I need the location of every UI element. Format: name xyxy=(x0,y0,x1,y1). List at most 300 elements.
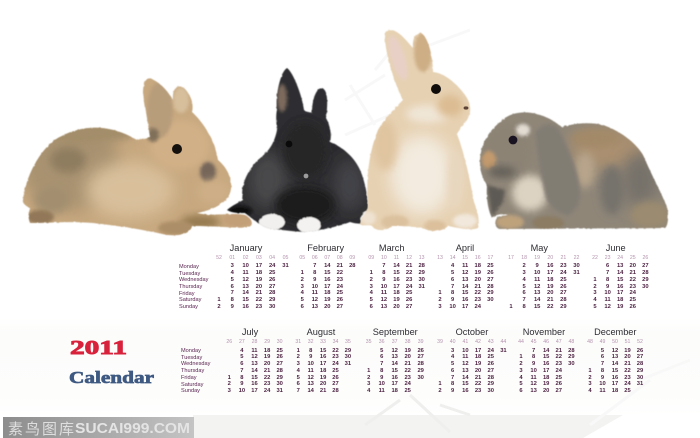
month: October: 18 xyxy=(475,354,481,360)
month: October: 8 xyxy=(451,381,454,387)
month: August: 24 xyxy=(332,361,339,367)
month: August: 30 xyxy=(345,354,351,360)
month: September: 1 xyxy=(367,368,370,374)
month: April: 14 xyxy=(450,255,455,261)
month: December: 22 xyxy=(624,368,631,374)
month: March: 10 xyxy=(381,284,387,290)
month: August: 32 xyxy=(308,339,314,345)
month: January: 01 xyxy=(229,255,235,261)
month: October: 41 xyxy=(462,339,468,345)
month: December: 2 xyxy=(588,375,592,381)
month: July: 10 xyxy=(239,388,245,394)
month: February: 2 xyxy=(301,277,304,283)
month: July: 26 xyxy=(276,354,283,360)
month: March: 22 xyxy=(406,270,412,276)
month: December: 23 xyxy=(624,375,631,381)
month: October: 15 xyxy=(462,381,469,387)
month: March: 12 xyxy=(381,297,387,303)
month: February: 9 xyxy=(313,277,316,283)
month: November: 21 xyxy=(556,348,562,354)
month: December: 5 xyxy=(601,348,604,354)
month: July: 20 xyxy=(264,361,270,367)
month: September xyxy=(366,327,424,394)
month: May: 14 xyxy=(534,297,540,303)
light calendar band xyxy=(0,318,700,416)
month: April: 6 xyxy=(451,277,454,283)
month: January: 10 xyxy=(242,263,249,269)
month: July: 27 xyxy=(276,361,283,367)
month: February: 15 xyxy=(324,270,331,276)
month: June: 15 xyxy=(617,277,623,283)
month: May: May xyxy=(531,243,548,253)
month: January: 22 xyxy=(256,297,262,303)
month: July xyxy=(226,327,283,394)
weekday labels: first half: Monday xyxy=(179,264,199,270)
month: July: 16 xyxy=(251,381,258,387)
month: July: 30 xyxy=(277,339,283,345)
month: October: 10 xyxy=(462,348,469,354)
month: March: 17 xyxy=(393,284,400,290)
month: August: 19 xyxy=(320,375,326,381)
month: August: 31 xyxy=(295,339,301,345)
month: November: November xyxy=(523,327,565,337)
month: September: 5 xyxy=(380,348,383,354)
watermark bar: SUCAI999.COM xyxy=(75,421,190,437)
month: December: 11 xyxy=(599,388,606,394)
month: August: 12 xyxy=(307,375,314,381)
rabbit 4: grey lop rabbit xyxy=(478,111,669,230)
month: February: 08 xyxy=(337,255,343,261)
month: November: 44 xyxy=(518,339,524,345)
month: July: 28 xyxy=(252,339,257,345)
weekday labels: second half: Sunday xyxy=(181,388,200,394)
rabbit 3: cream rabbit xyxy=(360,29,480,232)
month: September: 11 xyxy=(379,388,385,394)
month: November: 7 xyxy=(532,348,535,354)
weekday labels: first half: Sunday xyxy=(179,304,198,310)
month: April: 9 xyxy=(451,297,454,303)
month: October: 40 xyxy=(450,339,456,345)
month: June: 19 xyxy=(617,304,623,310)
month: December: 50 xyxy=(612,339,618,345)
month: December: 51 xyxy=(625,339,630,345)
month: March: 8 xyxy=(382,270,386,276)
month: March: 1 xyxy=(370,270,373,276)
weekday labels: second half: Friday xyxy=(181,375,197,381)
month: November: 30 xyxy=(568,361,575,367)
month: December: 13 xyxy=(612,354,618,360)
month: September: 10 xyxy=(378,381,385,387)
month: September: 4 xyxy=(367,388,370,394)
month: November: 46 xyxy=(543,339,549,345)
month: January: 15 xyxy=(242,297,249,303)
month: December: 16 xyxy=(612,375,618,381)
month: September: 3 xyxy=(367,381,370,387)
month: February: 05 xyxy=(299,255,305,261)
month: November: 18 xyxy=(543,375,549,381)
weekday labels: second half xyxy=(181,348,210,394)
month: June: 3 xyxy=(593,290,597,296)
month: January: 19 xyxy=(256,277,262,283)
month: March: 4 xyxy=(370,290,373,296)
month: April: 18 xyxy=(475,263,481,269)
month: April: 26 xyxy=(487,270,494,276)
weekday labels: first half: Wednesday xyxy=(179,277,208,283)
month: March: 3 xyxy=(370,284,373,290)
month: December: 20 xyxy=(624,354,631,360)
month: December: 31 xyxy=(637,381,643,387)
month: August: 27 xyxy=(332,381,339,387)
month: November: 27 xyxy=(556,388,562,394)
month: January: 03 xyxy=(256,255,262,261)
month: July: 28 xyxy=(276,368,283,374)
month: February: 20 xyxy=(324,304,331,310)
month: May: 23 xyxy=(560,263,567,269)
month: June: 23 xyxy=(605,255,610,261)
month: July: 6 xyxy=(240,361,244,367)
month: December: 7 xyxy=(601,361,604,367)
month: June: 27 xyxy=(642,263,649,269)
month: February: 24 xyxy=(337,284,343,290)
month: January: 24 xyxy=(269,263,275,269)
month: December: 3 xyxy=(588,381,592,387)
month: July: July xyxy=(242,327,258,337)
month: August: 29 xyxy=(345,348,351,354)
month: April: 23 xyxy=(475,297,481,303)
month: August: 20 xyxy=(320,381,326,387)
month: December: 9 xyxy=(601,375,604,381)
month: January: 8 xyxy=(231,297,234,303)
month: March: 20 xyxy=(393,304,400,310)
month: September: 35 xyxy=(366,339,372,345)
month: December: 12 xyxy=(612,348,618,354)
month: October: 28 xyxy=(488,375,494,381)
month: September: 17 xyxy=(391,381,398,387)
month: May: 19 xyxy=(534,255,540,261)
month: March: 2 xyxy=(370,277,373,283)
month: June: 17 xyxy=(617,290,623,296)
month: March: 09 xyxy=(368,255,374,261)
month: December: 17 xyxy=(612,381,618,387)
month: October: 3 xyxy=(451,348,454,354)
month: March: 7 xyxy=(382,263,386,269)
month: January: 9 xyxy=(231,304,234,310)
month: April: 10 xyxy=(449,304,456,310)
month: January: 05 xyxy=(283,255,288,261)
month: March: 15 xyxy=(393,270,400,276)
month: November: 47 xyxy=(556,339,562,345)
month: May: 13 xyxy=(534,290,540,296)
month: September: 37 xyxy=(392,339,398,345)
month: January: 1 xyxy=(217,297,221,303)
month: December: 24 xyxy=(624,381,631,387)
month: March: 28 xyxy=(418,263,425,269)
month: October: 23 xyxy=(475,388,481,394)
month: August: 9 xyxy=(309,354,312,360)
month: September: 13 xyxy=(391,354,398,360)
month: November: 10 xyxy=(530,368,537,374)
month: October: 4 xyxy=(451,354,454,360)
month: August: 3 xyxy=(297,361,300,367)
rabbit 1: tan rabbit xyxy=(22,78,252,236)
month: December: 8 xyxy=(601,368,604,374)
month: September: 22 xyxy=(404,368,411,374)
month: October: 2 xyxy=(438,388,442,394)
month: January: 31 xyxy=(282,263,289,269)
month: June: 13 xyxy=(617,263,623,269)
month: March: 18 xyxy=(393,290,400,296)
month: November: 6 xyxy=(519,388,523,394)
month: August: 26 xyxy=(332,375,339,381)
weekday labels: second half: Tuesday xyxy=(181,355,202,361)
weekday labels: first half: Tuesday xyxy=(179,271,200,277)
month: October: 7 xyxy=(451,375,454,381)
month: June: 4 xyxy=(593,297,597,303)
month: February: 4 xyxy=(301,290,304,296)
month: May: 27 xyxy=(560,290,567,296)
month: January: 17 xyxy=(256,263,262,269)
month: March: 6 xyxy=(370,304,373,310)
month: August: 15 xyxy=(320,348,326,354)
month: January: 14 xyxy=(242,290,249,296)
month: November: 5 xyxy=(519,381,523,387)
month: July: 14 xyxy=(251,368,258,374)
month: August: 5 xyxy=(297,375,300,381)
month: January: 5 xyxy=(231,277,234,283)
month: February: 28 xyxy=(349,263,356,269)
watermark bar xyxy=(3,417,194,438)
month: May: 19 xyxy=(547,284,553,290)
month: July: 22 xyxy=(264,375,270,381)
month: June: 16 xyxy=(617,284,623,290)
month: August: 4 xyxy=(297,368,300,374)
month: February: 09 xyxy=(349,255,355,261)
month: December: 26 xyxy=(637,348,643,354)
month: September: 8 xyxy=(380,368,383,374)
month: December: 21 xyxy=(624,361,631,367)
month: February: 26 xyxy=(337,297,343,303)
month: August: 22 xyxy=(332,348,339,354)
month: January: 11 xyxy=(243,270,249,276)
month: August: 2 xyxy=(297,354,300,360)
month: October: 1 xyxy=(438,381,442,387)
month: April: 15 xyxy=(462,255,468,261)
month: May: 5 xyxy=(522,284,526,290)
month: June: 6 xyxy=(606,263,609,269)
month: August: 33 xyxy=(320,339,326,345)
month: April: 16 xyxy=(475,255,481,261)
month: February: 06 xyxy=(312,255,318,261)
month: March: 24 xyxy=(406,284,412,290)
month: February: 22 xyxy=(337,270,343,276)
month: June: 22 xyxy=(630,277,636,283)
month: October: 30 xyxy=(488,388,494,394)
month: August: 18 xyxy=(320,368,326,374)
month: January: 2 xyxy=(217,304,221,310)
month: May: 3 xyxy=(522,270,526,276)
month: December xyxy=(587,327,644,394)
month: November: 1 xyxy=(519,354,523,360)
month: May: 25 xyxy=(560,277,567,283)
month: July: 15 xyxy=(251,375,258,381)
month: February: 3 xyxy=(301,284,304,290)
month: January xyxy=(216,243,289,310)
month: April: 5 xyxy=(451,270,454,276)
month: October: 11 xyxy=(462,354,468,360)
month: June: June xyxy=(606,243,626,253)
month: September: 27 xyxy=(417,354,424,360)
month: July: 23 xyxy=(264,381,270,387)
month: November: 15 xyxy=(543,354,549,360)
month: September: 6 xyxy=(380,354,383,360)
month: June: 5 xyxy=(593,304,597,310)
month: February: February xyxy=(307,243,344,253)
month: December: 28 xyxy=(637,361,643,367)
month: August xyxy=(295,327,351,394)
month: February: 12 xyxy=(312,297,318,303)
month: July: 29 xyxy=(264,339,270,345)
month: October: 27 xyxy=(488,368,494,374)
month: March: 31 xyxy=(418,284,425,290)
month: August: 8 xyxy=(309,348,312,354)
month: March: 9 xyxy=(382,277,386,283)
month: June: 9 xyxy=(606,284,609,290)
month: October: 6 xyxy=(451,368,454,374)
month: November: 13 xyxy=(530,388,537,394)
month: February: 8 xyxy=(313,270,316,276)
month: April: 13 xyxy=(437,255,443,261)
month: February: 23 xyxy=(337,277,343,283)
month: July: 8 xyxy=(240,375,244,381)
month: January: 18 xyxy=(256,270,262,276)
month: November: 24 xyxy=(556,368,562,374)
month: July: 7 xyxy=(240,368,244,374)
month: October: 13 xyxy=(462,368,469,374)
month: September: 30 xyxy=(417,375,424,381)
month: April: 12 xyxy=(462,270,468,276)
rabbit 4 eye xyxy=(509,136,517,144)
month: July: 5 xyxy=(240,354,244,360)
month: January: 16 xyxy=(242,304,249,310)
month: July: 12 xyxy=(251,354,258,360)
month: September: 21 xyxy=(404,361,411,367)
month: July: 26 xyxy=(226,339,232,345)
month: July: 19 xyxy=(264,354,270,360)
month: February xyxy=(299,243,356,310)
month: July: 3 xyxy=(228,388,231,394)
month: November: 23 xyxy=(556,361,562,367)
month: November: 3 xyxy=(519,368,523,374)
month: June: 2 xyxy=(593,284,597,290)
bottom grey wedge xyxy=(193,415,623,438)
month: June: 8 xyxy=(606,277,609,283)
month: September: September xyxy=(373,327,418,337)
month: March: 11 xyxy=(381,290,387,296)
month: September: 9 xyxy=(380,375,383,381)
month: May: 17 xyxy=(508,255,514,261)
month: June: 11 xyxy=(604,297,611,303)
month: December: 49 xyxy=(600,339,605,345)
month: December: 25 xyxy=(624,388,631,394)
month: November: 25 xyxy=(556,375,562,381)
month: February: 19 xyxy=(324,297,331,303)
month: January: 30 xyxy=(269,304,275,310)
month: November: 22 xyxy=(556,354,562,360)
month: August: 23 xyxy=(332,354,339,360)
month: April: 2 xyxy=(438,297,442,303)
month: October: 42 xyxy=(475,339,481,345)
month: August: 35 xyxy=(345,339,351,345)
rabbit 2: black rabbit xyxy=(226,68,368,233)
month: June: 12 xyxy=(604,304,611,310)
month: December: 52 xyxy=(637,339,643,345)
month: December: 30 xyxy=(637,375,643,381)
month: May: 22 xyxy=(547,304,553,310)
month: November: 19 xyxy=(543,381,549,387)
month: March: 14 xyxy=(393,263,400,269)
month: July: 30 xyxy=(276,381,283,387)
weekday labels: first half: Friday xyxy=(179,291,195,297)
month: September: 16 xyxy=(391,375,398,381)
weekday labels: second half: Wednesday xyxy=(181,361,210,367)
month: July: 17 xyxy=(251,388,258,394)
month: March: 29 xyxy=(418,270,425,276)
month: August: 34 xyxy=(333,339,338,345)
month: July: 18 xyxy=(264,348,270,354)
month: September: 28 xyxy=(417,361,424,367)
month: November: 17 xyxy=(543,368,549,374)
month: May: 8 xyxy=(522,304,526,310)
month: October: 43 xyxy=(488,339,494,345)
month: January: January xyxy=(230,243,262,253)
month: April: 17 xyxy=(487,255,493,261)
rabbit 2 eye xyxy=(286,141,292,147)
month: October: 44 xyxy=(501,339,506,345)
month: August: 31 xyxy=(345,361,351,367)
month: April: 28 xyxy=(487,284,494,290)
month: January: 26 xyxy=(269,277,275,283)
month: July: 4 xyxy=(240,348,244,354)
month: March: 11 xyxy=(394,255,399,261)
month: November: 4 xyxy=(519,375,523,381)
month: February: 21 xyxy=(337,263,343,269)
month: October: 12 xyxy=(462,361,469,367)
month: June: 21 xyxy=(630,270,636,276)
month: January: 3 xyxy=(231,263,234,269)
month: November: 45 xyxy=(531,339,536,345)
month: October: 29 xyxy=(488,381,494,387)
month: March: 5 xyxy=(370,297,373,303)
month: January: 7 xyxy=(231,290,234,296)
month: June: 25 xyxy=(630,255,636,261)
month: January: 27 xyxy=(269,284,275,290)
month: June: 20 xyxy=(630,263,636,269)
month: May: 17 xyxy=(547,270,553,276)
month: June: 14 xyxy=(617,270,623,276)
month: March: 23 xyxy=(406,277,412,283)
month: March: 26 xyxy=(406,297,412,303)
month: December: 27 xyxy=(637,354,643,360)
month: October xyxy=(437,327,507,394)
month: June xyxy=(592,243,649,310)
month: October: 5 xyxy=(451,361,454,367)
month: February: 17 xyxy=(324,284,331,290)
month: May: 28 xyxy=(560,297,567,303)
month: May: 2 xyxy=(522,263,526,269)
weekday labels: second half: Saturday xyxy=(181,382,203,388)
weekday labels: first half: Thursday xyxy=(179,284,202,290)
month: October: 39 xyxy=(437,339,443,345)
